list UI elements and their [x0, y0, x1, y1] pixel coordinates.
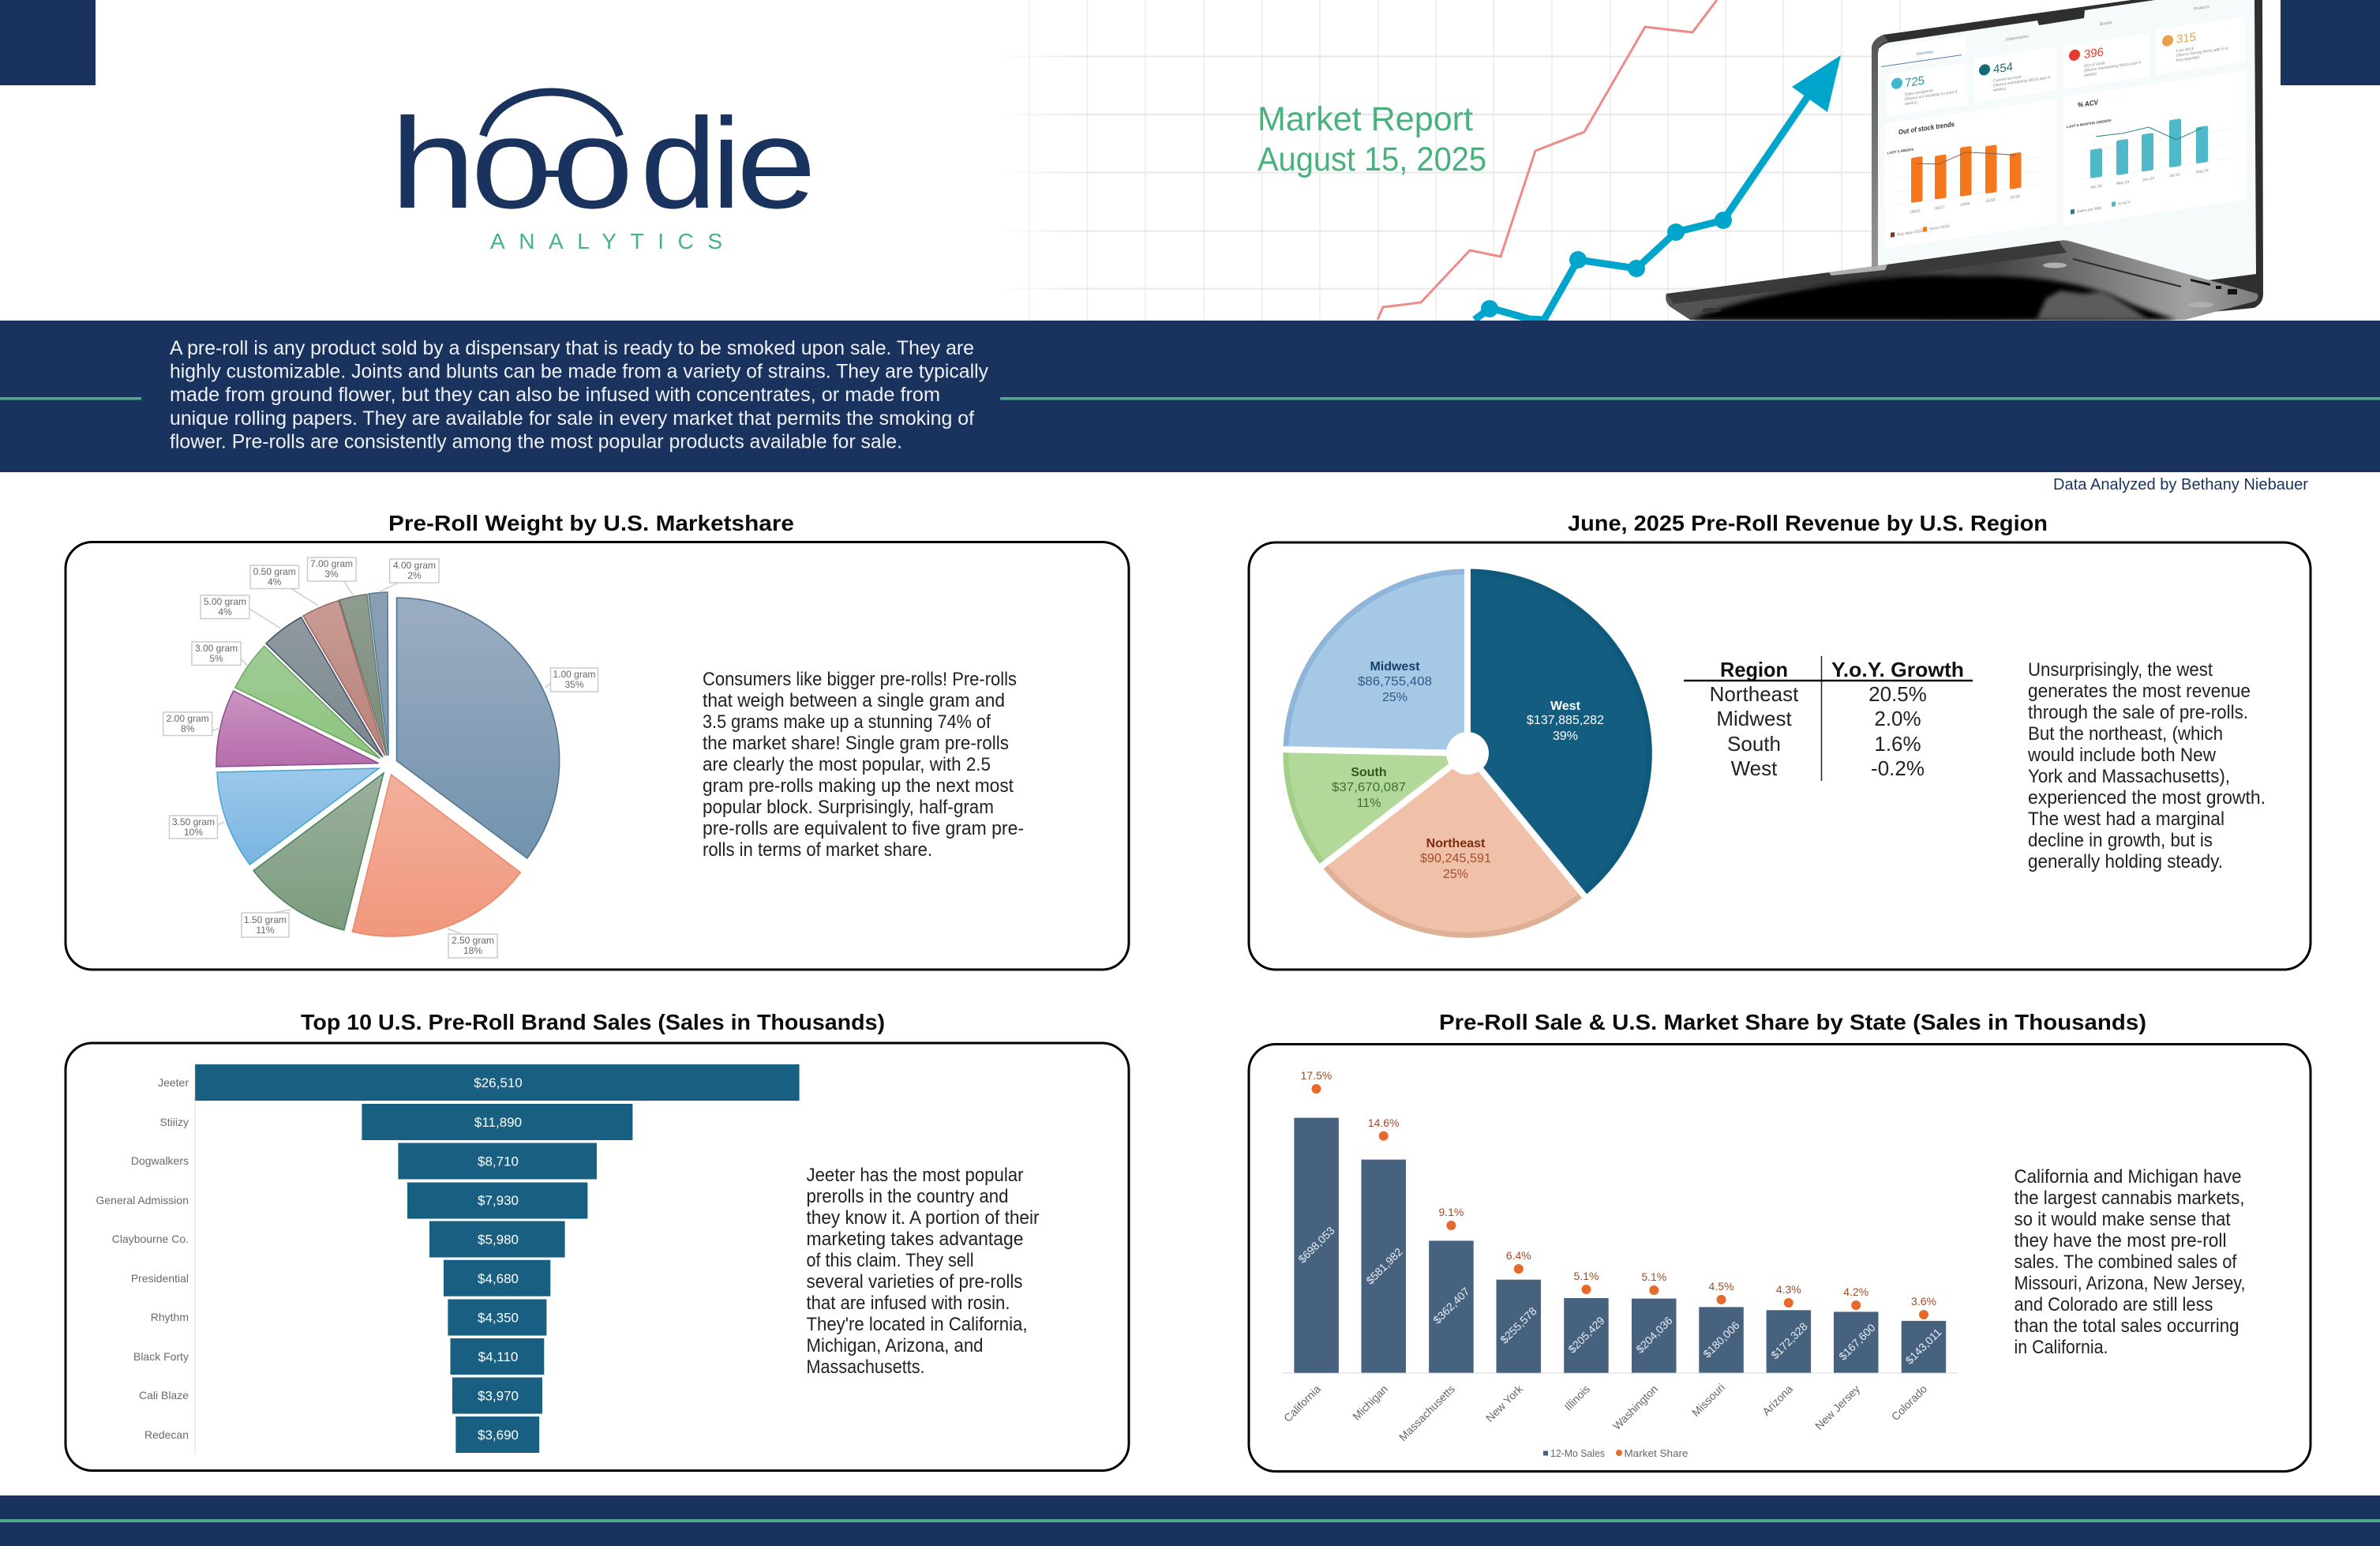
donut labels: $90,245,591 [1420, 852, 1491, 865]
text: brand commentary: prerolls in the country and [807, 1186, 1009, 1207]
red trend line [1377, 0, 1717, 320]
dashboard content: (Stores maintaining SKUs past 4 [1993, 75, 2050, 88]
bar values: $167,600 [1836, 1321, 1878, 1363]
pie data labels: 8% [181, 723, 195, 734]
text: state commentary: so it would make sense that [2015, 1209, 2231, 1230]
pie data labels: 2.50 gram [452, 935, 494, 946]
funnel bar chart: top brands: Dogwalkers [131, 1154, 189, 1167]
dashboard content: 315 [2176, 30, 2196, 47]
funnel bar chart: top brands: Claybourne Co. [112, 1233, 189, 1245]
heading: brands: Top 10 U.S. Pre-Roll Brand Sales (Sales in Thousands) [301, 1010, 885, 1034]
footer band [0, 1495, 2380, 1546]
panel: top brands [66, 1043, 1129, 1470]
pie data labels [163, 557, 598, 958]
market share labels: 6.4% [1506, 1249, 1531, 1262]
base shadow texture [1690, 276, 2177, 320]
dashboard content: (Stores having items with 5 or [2176, 46, 2228, 58]
heading: region revenue: June, 2025 Pre-Roll Revenue by U.S. Region [1568, 511, 2048, 535]
pie data labels: 5% [209, 653, 223, 664]
dashboard content: SKUs OOS [1929, 224, 1950, 232]
table: year over year growth: Region [1720, 658, 1788, 681]
logo: hoodie analytics: o [553, 91, 633, 235]
text: region commentary: experienced the most growth. [2028, 787, 2266, 809]
text: weight commentary: Consumers like bigger pre-rolls! Pre-rolls [703, 669, 1017, 690]
text: brand commentary: they know it. A portion of their [807, 1207, 1040, 1229]
bar values: $581,982 [1363, 1245, 1405, 1287]
dashboard content [1879, 0, 2247, 253]
text: brand commentary: Jeeter has the most popular [807, 1165, 1023, 1186]
chart legend [1543, 1447, 1688, 1459]
text: region commentary [2027, 659, 2266, 872]
report title and date [1257, 100, 1486, 178]
market share labels: 4.2% [1843, 1285, 1868, 1298]
intro text: made from ground flower, but they can also be infused with concentrates, or made from [170, 384, 940, 406]
intro text: flower. Pre-rolls are consistently among the most popular products available for sale. [170, 431, 902, 453]
logo: hoodie analytics: h [390, 91, 476, 235]
bar values: $255,578 [1497, 1304, 1539, 1346]
text: weight commentary: the market share! Single gram pre-rolls [703, 733, 1009, 754]
dashboard content: 09/27 [1935, 205, 1945, 212]
table: year over year growth: 1.6% [1874, 732, 1921, 756]
pie data labels: 3.00 gram [195, 643, 238, 654]
text: weight commentary: that weigh between a single gram and [703, 690, 1005, 711]
market share labels: 14.6% [1368, 1116, 1400, 1129]
donut labels: 39% [1553, 730, 1578, 743]
text: brand commentary: Massachusetts. [807, 1357, 925, 1378]
donut labels [1332, 660, 1604, 881]
table: year over year growth: Y.o.Y. Growth [1831, 658, 1964, 681]
text: state commentary: they have the most pre-roll [2015, 1230, 2226, 1251]
intro text: highly customizable. Joints and blunts can be made from a variety of strains. They are typically [170, 360, 988, 382]
table: year over year growth [1684, 656, 1973, 781]
corner block top right [2281, 0, 2380, 85]
state labels: Washington [1610, 1383, 1660, 1432]
state labels: New Jersey [1812, 1383, 1862, 1432]
market share labels: 4.3% [1776, 1283, 1801, 1296]
text: weight commentary [703, 669, 1024, 861]
text: region commentary: decline in growth, but is [2028, 830, 2213, 851]
table: year over year growth: 20.5% [1868, 682, 1927, 706]
dashboard content: % ACV [2078, 98, 2098, 109]
text: state commentary: than the total sales occurring [2015, 1315, 2239, 1337]
pie data labels: 10% [184, 827, 203, 838]
market share labels: 9.1% [1438, 1206, 1464, 1218]
dashboard content: Jul 24 [2169, 172, 2180, 178]
laptop base [1666, 240, 2258, 320]
text: region commentary: But the northeast, (which [2028, 723, 2223, 745]
text: weight commentary: pre-rolls are equivalent to five gram pre- [703, 818, 1024, 839]
text: weight commentary: popular block. Surprisingly, half-gram [703, 797, 994, 818]
chart legend: 12-Mo Sales [1550, 1447, 1605, 1459]
dashboard content: Products [2194, 5, 2209, 12]
pie data labels: 5.00 gram [204, 596, 246, 607]
base top edge shading [1666, 241, 2067, 304]
bar values: $204,036 [1633, 1314, 1675, 1356]
pie data labels: 4% [218, 606, 232, 617]
pie data labels: 1.00 gram [553, 669, 596, 680]
text: region commentary: would include both New [2027, 745, 2217, 766]
funnel bar chart: top brands: $5,980 [478, 1232, 519, 1248]
dashboard content: LAST 5 WEEKS [1887, 148, 1913, 155]
panel: region revenue [1249, 542, 2311, 970]
dashboard content: weeks) [1905, 100, 1917, 107]
text: brand commentary: They're located in California, [807, 1314, 1028, 1335]
pie data labels: 1.50 gram [244, 914, 287, 925]
pie data labels: 35% [564, 679, 584, 690]
report title and date: Market Report [1257, 100, 1473, 138]
state labels: Michigan [1350, 1383, 1390, 1423]
text: brand commentary: of this claim. They sell [807, 1250, 974, 1271]
dashboard content: Out of stock [2084, 61, 2105, 69]
dashboard content: Jun 24 [2142, 176, 2154, 182]
logo hood arc [483, 92, 620, 136]
pie data labels: 0.50 gram [253, 566, 296, 577]
market share labels: 3.6% [1911, 1295, 1936, 1308]
logo subtitle: ANALYTICS [490, 229, 722, 253]
pie data labels: 4.00 gram [393, 560, 436, 571]
state labels: California [1281, 1383, 1323, 1424]
text: weight commentary: gram pre-rolls making up the next most [703, 775, 1014, 797]
donut labels: $37,670,087 [1332, 781, 1406, 794]
funnel bar chart: top brands: Jeeter [158, 1076, 189, 1089]
text: weight commentary: are clearly the most popular, with 2.5 [703, 754, 991, 775]
text: brand commentary [807, 1165, 1040, 1378]
text: state commentary [2015, 1166, 2245, 1358]
laptop feet [1702, 262, 2213, 313]
state labels: Colorado [1889, 1383, 1929, 1423]
funnel bar chart: top brands: General Admission [96, 1194, 189, 1206]
text: brand commentary: Michigan, Arizona, and [807, 1335, 984, 1357]
market share markers [1312, 1084, 1928, 1319]
donut labels: Midwest [1370, 660, 1420, 674]
funnel bar chart: top brands: $11,890 [474, 1115, 522, 1130]
funnel bar chart: top brands: $3,970 [478, 1388, 519, 1404]
funnel bar chart: top brands: Rhythm [151, 1311, 189, 1323]
pie data labels: 18% [463, 945, 482, 956]
dashboard content: % ACV [2118, 200, 2131, 207]
chart legend: Market Share [1625, 1447, 1688, 1459]
panel: weight marketshare [66, 542, 1129, 970]
dashboard content: (Stores not stocking for past 4 [1905, 89, 1957, 102]
logo: hoodie analytics: d [640, 91, 717, 235]
dashboard content: Sales per MM [2077, 206, 2101, 214]
dashboard content: 725 [1905, 74, 1925, 90]
funnel bar chart: top brands: $4,680 [478, 1271, 519, 1286]
pie data labels: 3.50 gram [172, 816, 215, 827]
dashboard content: Aug 24 [2196, 168, 2209, 174]
funnel bar chart: top brands: $8,710 [478, 1154, 519, 1169]
dashboard content: 454 [1993, 60, 2013, 77]
pie data labels: 7.00 gram [310, 558, 353, 569]
table: year over year growth: Northeast [1710, 682, 1799, 706]
funnel bar chart: top brands: $7,930 [478, 1193, 519, 1208]
dashboard content: Brands [2100, 21, 2112, 27]
logo: hoodie analytics: i [712, 91, 740, 235]
intro text: A pre-roll is any product sold by a dispensary that is ready to be smoked upon sale. They are [170, 337, 974, 359]
text: weight commentary: 3.5 grams make up a stunning 74% of [703, 711, 991, 733]
dashboard content: Overview [1917, 50, 1933, 57]
blue growth arrow [1475, 55, 1841, 320]
donut chart: revenue by region [1278, 564, 1649, 935]
dashboard content: 09/20 [1910, 208, 1921, 215]
funnel bar chart: top brands: Redecan [144, 1428, 189, 1441]
bar values [1295, 1224, 1944, 1367]
text: region commentary: generally holding steady. [2028, 851, 2223, 872]
text: brand commentary: that are infused with rosin. [807, 1293, 1010, 1314]
text: region commentary: through the sale of pre-rolls. [2028, 702, 2248, 723]
donut labels: 25% [1443, 868, 1468, 881]
bar values: $362,407 [1430, 1285, 1472, 1326]
funnel bar chart: top brands: $3,690 [478, 1428, 519, 1443]
dashboard content: Out of stock trends [1898, 120, 1955, 136]
hinge highlight [1829, 265, 1887, 276]
combo chart: state sales and market share [1281, 1069, 1958, 1459]
market share labels: 17.5% [1301, 1069, 1332, 1082]
bar values: $172,328 [1768, 1320, 1810, 1361]
table: year over year growth: West [1731, 756, 1778, 780]
funnel bar chart: top brands: Cali Blaze [139, 1389, 189, 1402]
dashboard content: Current account [1993, 75, 2022, 84]
funnel bar chart: top brands: $4,350 [478, 1311, 519, 1325]
table: year over year growth: South [1727, 732, 1781, 756]
text: state commentary: the largest cannabis markets, [2015, 1188, 2245, 1209]
table: year over year growth: 2.0% [1874, 707, 1921, 730]
logo o connector [543, 171, 560, 177]
text: brand commentary: several varieties of pre-rolls [807, 1271, 1023, 1293]
base rock highlights [2037, 291, 2149, 320]
intro text [170, 337, 988, 453]
pie data labels: 3% [324, 568, 339, 580]
dashboard content: 396 [2084, 45, 2104, 62]
heading: state sales: Pre-Roll Sale & U.S. Market Share by State (Sales in Thousands) [1439, 1010, 2146, 1034]
funnel bar chart: top brands: Stiiizy [159, 1116, 189, 1128]
donut labels: West [1550, 700, 1581, 713]
table: year over year growth: Midwest [1716, 707, 1792, 730]
donut labels: Northeast [1426, 837, 1486, 850]
bar values: $698,053 [1295, 1224, 1337, 1266]
dashboard content: weeks) [2084, 72, 2097, 78]
market share labels: 5.1% [1574, 1270, 1599, 1282]
text: brand commentary: marketing takes advantage [807, 1229, 1023, 1250]
state labels: Illinois [1561, 1383, 1592, 1413]
dashboard content: 10/18 [2010, 194, 2020, 201]
text: state commentary: sales. The combined sales of [2015, 1251, 2237, 1273]
text: state commentary: Missouri, Arizona, New Jersey, [2015, 1273, 2245, 1294]
funnel bar chart: top brands: $26,510 [474, 1075, 523, 1090]
laptop screen [1878, 0, 2256, 281]
donut labels: $86,755,408 [1358, 675, 1432, 689]
market share labels: 4.5% [1709, 1280, 1733, 1293]
bar values: $205,429 [1565, 1314, 1607, 1356]
intro text: unique rolling papers. They are available for sale in every market that permits the smoking of [170, 407, 974, 430]
sales bars [1294, 1118, 1946, 1373]
dashboard content: less quantity) [2176, 55, 2200, 63]
donut labels: $137,885,282 [1527, 714, 1604, 727]
text: state commentary: in California. [2015, 1337, 2108, 1358]
logo: hoodie analytics: e [736, 91, 816, 235]
dashboard content: Apr 24 [2090, 184, 2102, 190]
report title and date: August 15, 2025 [1257, 141, 1486, 178]
intro band [0, 321, 2380, 472]
pie data labels: 11% [256, 925, 275, 936]
state labels: New York [1483, 1382, 1526, 1424]
state labels: Arizona [1760, 1383, 1795, 1418]
dashboard content: Low stock [2176, 47, 2194, 54]
donut labels: 11% [1357, 797, 1381, 810]
funnel bar chart: top brands: Black Forty [133, 1350, 189, 1363]
state labels [1281, 1381, 1929, 1443]
dashboard content: (Stores maintaining SKUs past 4 [2084, 60, 2141, 73]
text: region commentary: York and Massachusetts), [2028, 766, 2230, 787]
text: state commentary: California and Michigan have [2015, 1166, 2242, 1188]
donut labels: 25% [1382, 691, 1407, 704]
logo: hoodie analytics: o [470, 91, 553, 235]
pie data labels: 2% [407, 570, 422, 581]
dashboard content: May 24 [2116, 180, 2130, 186]
text: state commentary: and Colorado are still less [2015, 1294, 2213, 1315]
dashboard content: Dispensaries [2006, 34, 2029, 42]
text: weight commentary: rolls in terms of market share. [703, 839, 932, 861]
corner block top left [0, 0, 96, 85]
funnel bar chart: top brands [96, 1064, 800, 1454]
donut labels: South [1351, 766, 1387, 779]
text: region commentary: The west had a marginal [2028, 809, 2224, 830]
logo: hoodie analytics [390, 91, 816, 253]
dashboard content: 10/18 [1985, 197, 1996, 204]
dashboard content: LAST 6 MONTHS ORDERS [2067, 118, 2112, 129]
heading: weight: Pre-Roll Weight by U.S. Marketshare [388, 511, 794, 535]
text: region commentary: Unsurprisingly, the west [2028, 659, 2213, 681]
exploded pie chart: pre-roll weight [216, 592, 560, 936]
bar values: $180,006 [1700, 1319, 1742, 1360]
state labels: Massachusetts [1396, 1383, 1457, 1443]
dashboard content: 10/04 [1960, 201, 1970, 208]
laptop bezel [1872, 0, 2263, 320]
bar values: $143,011 [1903, 1326, 1944, 1367]
header background chart grid [996, 0, 1900, 320]
dashboard content: Avg days OOS [1897, 229, 1924, 238]
funnel bar chart: top brands: Presidential [131, 1272, 189, 1285]
market share labels [1301, 1069, 1936, 1308]
state labels: Missouri [1689, 1381, 1727, 1419]
pie data labels: 4% [268, 576, 282, 587]
base side slot [2073, 259, 2181, 287]
dashboard content: Sales prospects [1905, 88, 1933, 97]
laptop with dashboard [1666, 0, 2263, 320]
text: region commentary: generates the most revenue [2028, 681, 2251, 702]
pie data labels: 2.00 gram [167, 713, 209, 724]
laptop ports [2191, 279, 2237, 295]
left bezel highlight [1872, 35, 1888, 272]
market share labels: 5.1% [1641, 1270, 1666, 1283]
dashboard content: weeks) [1993, 86, 2006, 93]
funnel bar chart: top brands: $4,110 [478, 1349, 518, 1364]
table: year over year growth: -0.2% [1871, 756, 1925, 780]
panel: state sales [1249, 1044, 2311, 1472]
credit line: Data Analyzed by Bethany Niebauer [2053, 476, 2308, 493]
